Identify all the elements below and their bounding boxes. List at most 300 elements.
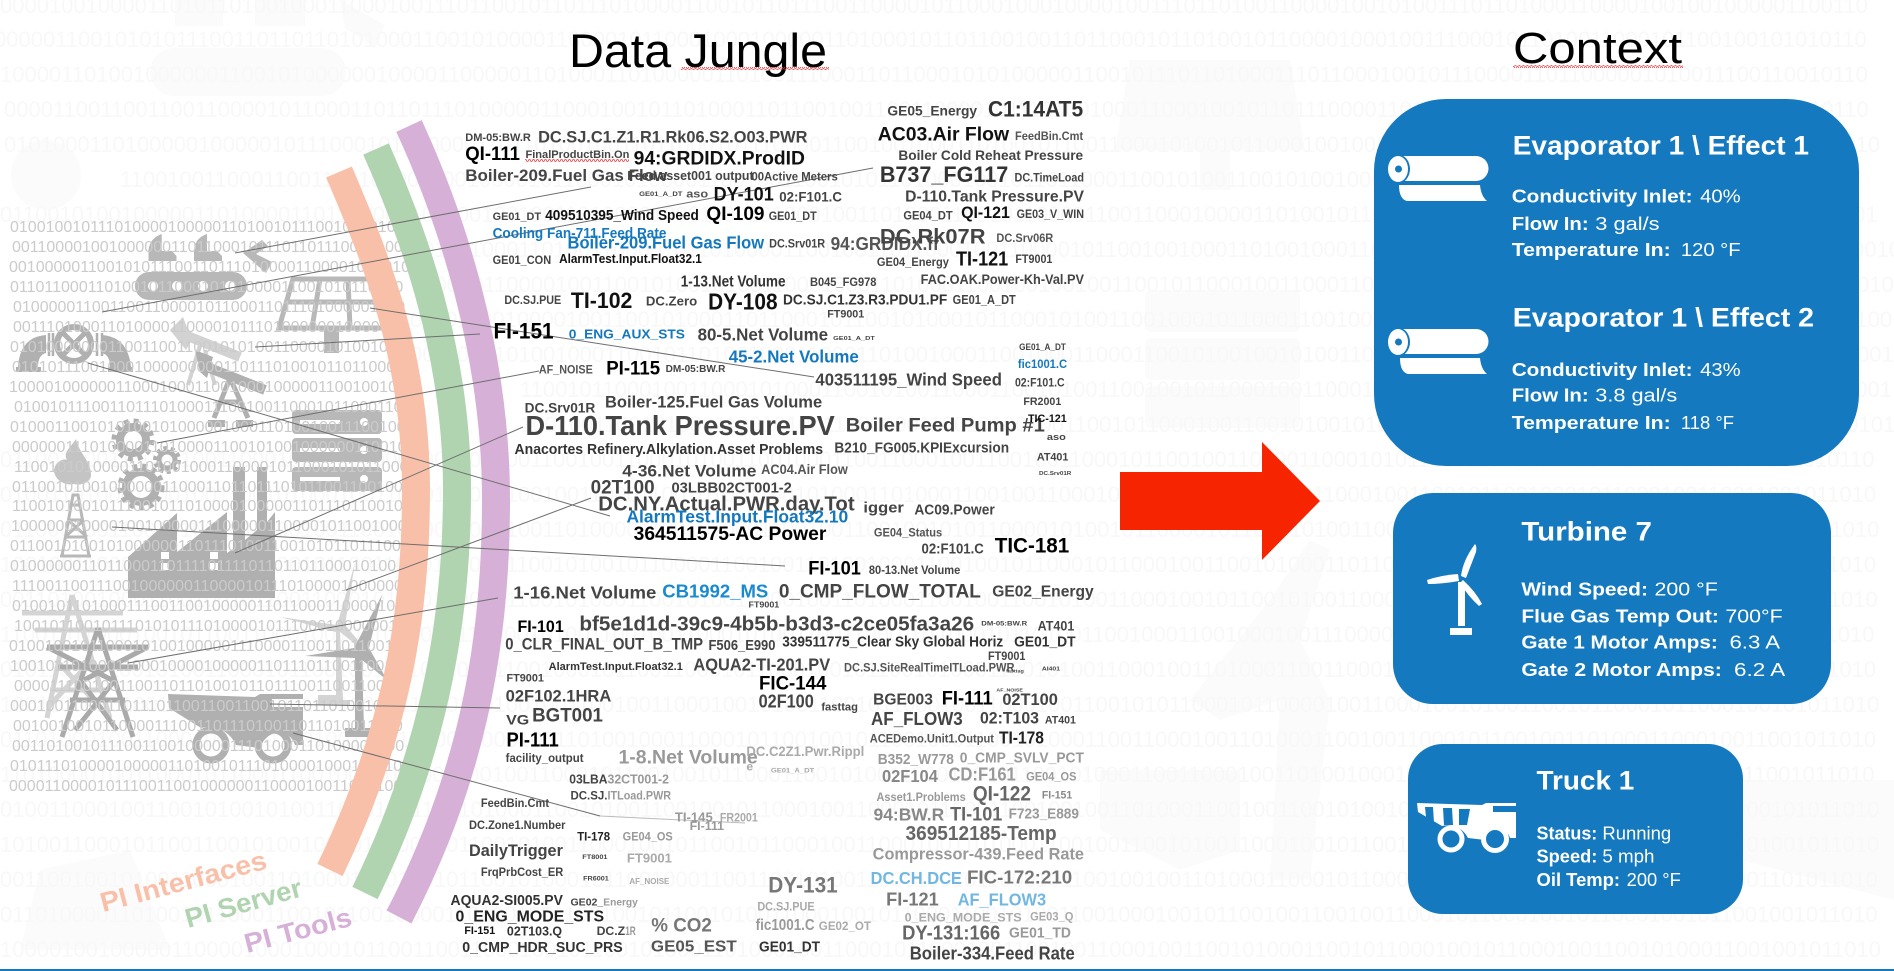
background binary pattern: 011000100110010100101100010011001010011000100110100001100101000110010011001001010110000101001011000010110001010011001011010011000100100101100010110001011010 bbox=[0, 517, 1879, 542]
foreground binary text bbox=[9, 219, 410, 795]
word cloud: upper tags: DC.Zero bbox=[646, 295, 697, 309]
icon: server bbox=[292, 410, 382, 491]
foreground binary text: 010101110010001000000000110111010010110110001 bbox=[12, 359, 404, 376]
word cloud: upper tags: GE04_Energy bbox=[877, 255, 949, 269]
word cloud: upper tags: GE01_CON bbox=[493, 253, 551, 267]
word cloud: lower tags: DC.SJ.PUE bbox=[757, 900, 815, 913]
word cloud: upper tags: GE01_DT bbox=[493, 209, 541, 223]
card text: truck readings bbox=[1537, 766, 1681, 891]
word cloud: lower tags: AF_FLOW3 bbox=[871, 708, 963, 729]
word cloud: lower tags: 32CT001-2 bbox=[608, 773, 669, 787]
word cloud: upper tags: DM-05:BW.R bbox=[666, 363, 726, 375]
card text: truck readings: Speed: bbox=[1537, 846, 1597, 867]
word cloud: upper tags: DY-101 bbox=[714, 183, 774, 205]
word cloud: lower tags: ITLoad.PWR bbox=[608, 789, 671, 802]
word cloud: middle tags: AC09.Power bbox=[914, 501, 995, 518]
word cloud: upper tags: 409510395_Wind Speed bbox=[545, 207, 699, 223]
word cloud: upper tags: DC.SJ.C1.Z3.R3.PDU1.PF bbox=[783, 291, 947, 308]
word cloud: upper tags: 02:F101.C bbox=[1015, 376, 1065, 389]
word cloud: middle tags: D-110.Tank Pressure.PV bbox=[525, 410, 835, 441]
card text: evaporator readings bbox=[1512, 131, 1814, 434]
word cloud: upper tags: 0_ENG_AUX_STS bbox=[569, 328, 685, 342]
word cloud: lower tags: FT9001 bbox=[507, 672, 544, 684]
card text: evaporator readings: 40% bbox=[1700, 186, 1741, 207]
word cloud: upper tags: FeedBin.Cmt bbox=[1015, 129, 1084, 143]
word cloud: middle tags: 03LBB02CT001-2 bbox=[671, 479, 792, 496]
word cloud: lower tags: FT8001 bbox=[582, 853, 608, 861]
card text: evaporator readings: 118 °F bbox=[1681, 413, 1734, 434]
wavy underline under FinalProductBin.On bbox=[525, 159, 629, 162]
word cloud: lower tags bbox=[451, 672, 1084, 964]
arc: PI Tools bbox=[399, 126, 496, 917]
word cloud: lower tags: GE02_ bbox=[570, 897, 604, 908]
word cloud: lower tags: AF_FLOW3 bbox=[958, 890, 1046, 910]
foreground binary text: 000011100100110011011010010110111001100110001 bbox=[14, 678, 403, 695]
foreground binary text: 0010000011001010111001101110100001100001001010 bbox=[9, 259, 410, 276]
word cloud: middle tags: B210_FG005.KPIExcursion bbox=[834, 439, 1009, 456]
background binary pattern: 110010110001001100010100011001010011000110010100110010010110001001100010110010100110100010011000100101100010110001 bbox=[520, 377, 1892, 402]
icon: wind turbines bbox=[280, 563, 387, 737]
word cloud: middle tags: Boiler Feed Pump #1 bbox=[846, 414, 1045, 436]
word cloud: upper tags: DC.Srv01R bbox=[769, 237, 825, 250]
word cloud: middle tags: 02:F101.C bbox=[922, 540, 984, 557]
word cloud: lower tags: Boiler-334.Feed Rate bbox=[910, 943, 1075, 964]
card text: evaporator readings: Flow In: bbox=[1512, 214, 1589, 235]
word cloud: lower tags: BGE003 bbox=[873, 691, 933, 708]
card text: turbine readings: 6.2 A bbox=[1734, 660, 1785, 681]
foreground binary text: 010111010000100000110100101110100001000110110 bbox=[10, 758, 402, 775]
word cloud: lower tags: FI-111 bbox=[690, 819, 724, 833]
word cloud: lower tags: DC.Z bbox=[597, 924, 625, 938]
word cloud: lower tags: DC.C2Z1.Pwr.Rippl bbox=[746, 745, 864, 760]
word cloud: lower tags: Asset1.Problems bbox=[876, 790, 966, 804]
card text: turbine readings: Turbine 7 bbox=[1521, 517, 1652, 547]
icon: roll 2 bbox=[1386, 328, 1488, 374]
background binary pattern: 000011001100110011000010110001101101110100000110001001011010001101100100110011000010111010010001100010010110111000011010110001001100001011010001100101010110 bbox=[4, 97, 1869, 122]
word cloud: lower tags: 02F104 bbox=[882, 767, 939, 786]
card text: evaporator readings: Temperature In: bbox=[1512, 413, 1671, 434]
foreground binary text: 010000001101100011011110111101101101100010100 bbox=[10, 558, 396, 575]
background binary pattern: 001101001000110010010110011000101100100010110010100011001010011000100110100011001001100101001100010010110010100110001100010010110100001100100110100001011010 bbox=[0, 587, 1878, 612]
word cloud: lower tags: ACEDemo.Unit1.Output bbox=[870, 732, 994, 745]
bottom rule bbox=[0, 969, 1894, 971]
card text: turbine readings: 200 °F bbox=[1655, 579, 1718, 600]
word cloud: lower tags: DC.SJ. bbox=[570, 789, 608, 802]
background binary pattern: 100001101001000000110010100000010000110000011010001101000001101001110001101100010101000001100101110110100011101100010010111000011011000001010011100110010110 bbox=[0, 62, 1868, 87]
word cloud: lower tags: PI-111 bbox=[507, 728, 559, 751]
word cloud: upper tags: GE03_V_WIN bbox=[1017, 207, 1084, 221]
background binary pattern: 010110001100101001100010110010011010010001100100010110011000101100010010110010100011001010011000100110100011001100010110010011010010110001010011000101011010 bbox=[0, 657, 1876, 682]
word cloud: middle tags: AT401 bbox=[1037, 451, 1068, 463]
word cloud: upper tags: QI-111 bbox=[465, 142, 520, 164]
word cloud: lower tags: 94:BW.R bbox=[874, 806, 945, 825]
card text: evaporator readings: Flow In: bbox=[1512, 385, 1589, 406]
word cloud: lower tags: TI-101 bbox=[950, 803, 1002, 825]
word cloud: middle tags: 1-16.Net Volume bbox=[513, 584, 656, 603]
word cloud: lower tags: AF_NOISE bbox=[629, 877, 669, 887]
arrow: red transition arrow bbox=[1120, 442, 1320, 560]
panel: evaporator context card bbox=[1374, 99, 1859, 466]
background binary pattern: 011010000110100101100011001011001000011010010011001001011001010011000100101100011001010011001000100101100100110010011000101100010010110001001011001001011010 bbox=[0, 902, 1878, 927]
foreground binary text: 010000011001100110000101100011011101000001000 bbox=[13, 299, 405, 316]
word cloud: upper tags: TI-121 bbox=[956, 247, 1008, 270]
word cloud: lower tags: BGT001 bbox=[532, 704, 603, 726]
word cloud: middle tags: 80-13.Net Volume bbox=[869, 563, 961, 577]
word cloud: middle tags: 02T100 bbox=[591, 476, 655, 498]
background binary pattern: 011001010010000011010000110110000010110010010011010000100011001010001001101000110010110000110011000100001101001011000110100101100011001001010101100100101101 bbox=[0, 202, 1878, 227]
word cloud: lower tags: 0_ENG_MODE_STS bbox=[905, 911, 1022, 924]
word cloud: lower tags: 02F102.1HRA bbox=[506, 687, 612, 706]
arc: PI Server bbox=[365, 149, 457, 893]
card text: evaporator readings: 3.8 gal/s bbox=[1595, 385, 1677, 406]
word cloud: upper tags: C1:14AT5 bbox=[988, 97, 1083, 122]
word cloud: upper tags: GE01_A_DT bbox=[1019, 342, 1066, 353]
word cloud: upper tags: DM-05:BW.R bbox=[465, 131, 531, 144]
foreground binary text: 100000010000100100000111000001100001011001000 bbox=[11, 518, 407, 535]
icon: valve bbox=[16, 327, 133, 372]
word cloud: upper tags: Feed.asset001 output bbox=[627, 169, 754, 184]
word cloud: upper tags: AC03.Air Flow bbox=[878, 123, 1010, 145]
word cloud: middle tags: aso bbox=[1047, 432, 1066, 443]
card text: turbine readings: Wind Speed: bbox=[1521, 579, 1648, 600]
word cloud: lower tags: DY-131 bbox=[768, 873, 838, 898]
word cloud: upper tags: AlarmTest.Input.Float32.1 bbox=[559, 252, 702, 266]
card text: turbine readings bbox=[1521, 517, 1785, 681]
word cloud: middle tags: TIC-181 bbox=[995, 534, 1069, 558]
word cloud: lower tags: 0_CMP_SVLV_PCT bbox=[960, 749, 1084, 766]
word cloud: upper tags: 94:GRDIDX.ProdID bbox=[634, 147, 805, 169]
rotated legend labels bbox=[97, 845, 355, 959]
word cloud: middle tags: 4-36.Net Volume bbox=[622, 463, 757, 481]
word cloud: upper tags: 94:GRDIDX.ff bbox=[831, 233, 940, 254]
word cloud: middle tags: CB1992_MS bbox=[662, 581, 768, 602]
word cloud: middle tags: DC.Srv01R bbox=[1039, 471, 1071, 477]
word cloud: lower tags: GE04_OS bbox=[1026, 770, 1076, 783]
word cloud: lower tags: e bbox=[746, 760, 753, 773]
foreground binary text: 010010110100011100110010000011011000110000100 bbox=[12, 598, 404, 615]
word cloud: middle tags: AlarmTest.Input.Float32.10 bbox=[626, 508, 848, 527]
word cloud: lower tags: AF_NOISE bbox=[996, 688, 1023, 693]
word cloud: middle tags: TIC-121 bbox=[1028, 412, 1067, 425]
word cloud: middle tags: AQUA2-TI-201.PV bbox=[693, 656, 831, 675]
icon: truck bbox=[168, 694, 303, 760]
foreground binary text: 000100110001101110110011001100101101101001001 bbox=[10, 698, 400, 715]
word cloud: upper tags: Boiler-209.Fuel Gas Flow bbox=[465, 167, 668, 185]
foreground binary text: 011001010010100000011011101001100101011011100 bbox=[10, 538, 401, 555]
word cloud: upper tags: QI-121 bbox=[961, 204, 1010, 222]
panel: turbine context card bbox=[1393, 493, 1831, 704]
word cloud: upper tags: TI-102 bbox=[571, 289, 632, 313]
word cloud: lower tags: % CO2 bbox=[651, 914, 712, 936]
card text: turbine readings: 700°F bbox=[1725, 606, 1783, 627]
word cloud: middle tags bbox=[505, 394, 1094, 675]
icon: pylons bbox=[22, 595, 148, 737]
arc: PI Interfaces bbox=[330, 172, 416, 870]
word cloud: middle tags: FT9001 bbox=[988, 649, 1026, 663]
word cloud: lower tags: TI-178 bbox=[577, 830, 610, 843]
word cloud: lower tags: TI-178 bbox=[999, 728, 1044, 748]
word cloud: lower tags: GE01_TD bbox=[1009, 924, 1071, 941]
foreground binary text: 010010010110001010010000011100001100110110010 bbox=[9, 638, 402, 655]
word cloud: upper tags: 00Active Meters bbox=[751, 170, 838, 183]
card text: evaporator readings: 3 gal/s bbox=[1595, 214, 1660, 235]
word cloud: upper tags: FAC.OAK.Power-Kh-Val.PV bbox=[921, 273, 1084, 287]
word cloud: middle tags: FI-101 bbox=[517, 618, 564, 636]
word cloud: middle tags: AT401 bbox=[1038, 619, 1074, 634]
icon: solar panel bbox=[279, 279, 385, 353]
foreground binary text: 100101100101110101011101000010111000100000010 bbox=[14, 618, 406, 635]
word cloud: upper tags: fic1001.C bbox=[1018, 357, 1067, 371]
word cloud: middle tags: GE04_Status bbox=[874, 526, 942, 539]
word cloud: lower tags: fasttag bbox=[821, 701, 858, 713]
word cloud: lower tags: FI-121 bbox=[886, 889, 939, 910]
foreground binary text: 100001000000110001000110010001000001100100100 bbox=[9, 379, 406, 396]
word cloud: lower tags: 0_ENG_MODE_STS bbox=[456, 908, 604, 925]
word cloud: upper tags: DC.SJ.C1.Z1.R1.Rk06.S2.O03.PWR bbox=[538, 128, 808, 147]
word cloud: lower tags: B352_W778 bbox=[878, 751, 954, 768]
word cloud: middle tags: FT9001 bbox=[749, 601, 780, 610]
word cloud: lower tags: 0_CMP_HDR_SUC_PRS bbox=[462, 939, 623, 955]
word cloud: lower tags: Compressor-439.Feed Rate bbox=[873, 845, 1084, 864]
card text: evaporator readings: 120 °F bbox=[1681, 240, 1741, 261]
foreground binary text: 010100000001100110011001010100110000101001000 bbox=[10, 339, 406, 356]
word cloud: upper tags: 403511195_Wind Speed bbox=[815, 371, 1002, 390]
word cloud: upper tags: FT9001 bbox=[1015, 252, 1053, 266]
foreground binary text: 010001100101010010100000100011010010011100100 bbox=[10, 419, 406, 436]
connector lines bbox=[88, 168, 873, 823]
word cloud: lower tags: FI-151 bbox=[1042, 789, 1072, 801]
word cloud: lower tags: GE05_EST bbox=[651, 938, 737, 955]
foreground binary text: 111001100111001000000110000101110100001000000 bbox=[12, 578, 403, 595]
word cloud: upper tags: Boiler-209.Fuel Gas Flow bbox=[568, 234, 764, 253]
card text: turbine readings: Gate 2 Motor Amps: bbox=[1521, 660, 1722, 681]
label: PI Tools: PI Tools bbox=[241, 902, 355, 959]
background binary pattern: 110100001001100010110001100100010110011001001100010110010010110001100101001100010010110010100011001100010011010010001100010110001100101001100010011001011010 bbox=[0, 762, 1874, 787]
word cloud: lower tags: facility_output bbox=[506, 751, 584, 765]
word cloud: upper tags: DC.Srv06R bbox=[996, 231, 1053, 245]
word cloud: middle tags: AlarmTest.Input.Float32.1 bbox=[549, 660, 683, 673]
card text: evaporator readings: 43% bbox=[1700, 360, 1741, 381]
word cloud: lower tags: GE01_A_DT bbox=[771, 766, 815, 774]
foreground binary text: 110010101000011010010001100001011000101011000 bbox=[14, 459, 409, 476]
word cloud: upper tags: GE01_A_DT bbox=[639, 190, 683, 198]
word cloud: upper tags bbox=[465, 97, 1085, 390]
word cloud: lower tags: GE03_Q bbox=[1030, 910, 1074, 923]
word cloud: lower tags: GE01_DT bbox=[759, 938, 821, 955]
word cloud: lower tags: 02T100 bbox=[1002, 691, 1058, 709]
word cloud: lower tags: DC.Zone1.Number bbox=[469, 818, 566, 832]
word cloud: lower tags: GE04_OS bbox=[623, 830, 673, 843]
word cloud: upper tags: DC.Rk07R bbox=[880, 225, 986, 249]
word cloud: middle tags: AI401 bbox=[1042, 667, 1060, 672]
card text: truck readings: Running bbox=[1602, 823, 1671, 844]
background binary pattern: 010100011010000010000010111000101010000110110100100110110001011100001100100100011010010110011000101001011000100100100110100011011010001011010010110010010110 bbox=[4, 132, 1880, 157]
background binary pattern: 101001100010110011001010010010110001001100101001100010010110010110001001100010011010001100100110010100110001001011001001000110010011001010010110001001011010 bbox=[0, 832, 1879, 857]
word cloud: middle tags: DM-05:BW.R bbox=[981, 619, 1028, 627]
word cloud: middle tags: Boiler-125.Fuel Gas Volume bbox=[605, 394, 822, 412]
icon: derrick bbox=[60, 495, 91, 556]
word cloud: lower tags: VG bbox=[506, 713, 529, 728]
background binary pattern: 100100110000101101000110010110011000101000110010100101100001100100110100100011001001011000101100010011001010001101100100010110001101000100101100110001011010 bbox=[0, 552, 1876, 577]
card text: truck readings: Status: bbox=[1537, 823, 1597, 844]
icon: flame bbox=[54, 439, 91, 485]
card text: evaporator readings: Temperature In: bbox=[1512, 240, 1671, 261]
word cloud: upper tags: DY-108 bbox=[708, 288, 778, 315]
word cloud: lower tags: 02T103.Q bbox=[507, 925, 562, 939]
word cloud: lower tags: FrqPrbCost_ER bbox=[481, 865, 563, 879]
card text: truck readings: 5 mph bbox=[1602, 846, 1655, 867]
foreground binary text: 001100001001000000110110001011101101110010100 bbox=[12, 239, 403, 256]
word cloud: lower tags: DY-131:166 bbox=[902, 921, 1000, 944]
icon: factory bbox=[128, 467, 275, 598]
background binary pattern: 010011000100110010100101001100010011001010001100101001100100101100010011000101100011001001001101000110010011001010010110001001100010010110010011000101011010 bbox=[0, 797, 1879, 822]
icon: gears bbox=[114, 421, 179, 508]
foreground binary text: 000011000010111001100100000011000010011000100 bbox=[9, 778, 402, 795]
word cloud: lower tags: FI-111 bbox=[942, 687, 993, 709]
foreground binary text: 100101101000110001000010000011011101100110011 bbox=[10, 658, 401, 675]
word cloud: upper tags: 02:F101.C bbox=[779, 190, 842, 205]
word cloud: lower tags: CD:F161 bbox=[948, 764, 1016, 785]
card text: truck readings: Oil Temp: bbox=[1537, 870, 1620, 891]
foreground binary text: 001110100011010000110000101110100000010000010 bbox=[13, 319, 406, 336]
icon: truck bbox=[1417, 803, 1516, 850]
word cloud: lower tags: FI-151 bbox=[464, 924, 495, 937]
word cloud: lower tags: F723_E889 bbox=[1009, 805, 1079, 822]
icon: pumpjack bbox=[170, 317, 265, 427]
word cloud: lower tags: Energy bbox=[603, 897, 638, 908]
word cloud: upper tags: D-110.Tank Pressure.PV bbox=[905, 188, 1085, 205]
word cloud: middle tags: 0_CLR_FINAL_OUT_B_TMP bbox=[505, 636, 703, 654]
word cloud: upper tags: GE05_Energy bbox=[887, 104, 977, 119]
foreground binary text: 001101001011100110010000011101000110100000100 bbox=[12, 738, 404, 755]
title: Data Jungle: Data Jungle bbox=[569, 24, 827, 77]
word cloud: lower tags: 369512185-Temp bbox=[906, 822, 1057, 844]
card text: turbine readings: Flue Gas Temp Out: bbox=[1521, 606, 1719, 627]
card text: truck readings: 200 °F bbox=[1627, 870, 1681, 891]
icon: conveyor bbox=[135, 234, 272, 300]
label: PI Server: PI Server bbox=[182, 873, 306, 934]
background binary pattern: 001100100101001100010011010001100100101100101000101100100011001100101001100010010110001011001001001101000110001011000100110010010100110001011001001101011010 bbox=[0, 867, 1878, 892]
word cloud: middle tags: bf5e1d1d-39c9-4b5b-b3d3-c2ce05fa3a26 bbox=[579, 612, 974, 635]
word cloud: middle tags: 364511575-AC Power bbox=[634, 522, 827, 544]
foreground binary text: 011011000110100101100010101000011001010110000 bbox=[10, 279, 403, 296]
background binary pattern: 100100110010100011001010011000100110010100100110010110001001100101001010011000100110001001011000100101100101100101 bbox=[520, 412, 1894, 437]
background binary pattern: 000001100101010111001101101101010001100101000011000010110001000100000110100010110110010011011000101101001011000010001001110001011010011000101100100101010110 bbox=[0, 27, 1867, 52]
word cloud: middle tags: GE01_DT bbox=[1014, 633, 1076, 650]
word cloud: lower tags: 02F100 bbox=[759, 691, 814, 712]
card text: turbine readings: 6.3 A bbox=[1729, 632, 1780, 653]
word cloud: middle tags: 0_CMP_FLOW_TOTAL bbox=[779, 580, 981, 602]
panel: concentric PI arcs bbox=[330, 126, 496, 917]
title: Context: Context bbox=[1513, 24, 1682, 73]
word cloud: lower tags: FR2001 bbox=[720, 811, 758, 824]
word cloud: middle tags: AC04.Air Flow bbox=[761, 463, 848, 478]
word cloud: upper tags: aso bbox=[686, 188, 708, 200]
foreground binary text: 011001010010000001100011011011101011001100100 bbox=[12, 479, 403, 496]
word cloud: lower tags: DailyTrigger bbox=[469, 842, 563, 860]
word cloud: lower tags: AQUA2-SI005.PV bbox=[451, 892, 563, 908]
background binary pattern: 100001001000001100001000100010110011001100010010110010100011010001001100010110001001100100110001001100101000110010110001001011000100110010100011001001011010 bbox=[0, 937, 1881, 962]
background binary pattern: 100110001010011000100110010010010110001101001001100100110001001010011001011000100110001001100101011000101100001001100010010100110010110001011000100101011010 bbox=[0, 692, 1879, 717]
word cloud: lower tags: FT9001 bbox=[627, 852, 672, 866]
word cloud: lower tags: 02:T103 bbox=[980, 709, 1039, 728]
icon: wind turbine bbox=[1427, 544, 1482, 635]
word cloud: middle tags: Anacortes Refinery.Alkylation.Asset Problems bbox=[514, 441, 823, 458]
word cloud: upper tags: GE01_DT bbox=[769, 209, 817, 223]
word cloud: lower tags: GE02_OT bbox=[819, 919, 872, 933]
word cloud: lower tags: DC.CH.DCE bbox=[871, 869, 962, 888]
word cloud: lower tags: FIC-172:210 bbox=[967, 867, 1072, 888]
background binary pattern: 010011010001100100110010100010011000110010100100110001100101001100101000110100011001001100010110011001001010011000100110010110010001011000100110011001011010 bbox=[0, 482, 1876, 507]
word cloud: middle tags: fasttag bbox=[1006, 669, 1024, 674]
word cloud: upper tags: AF_NOISE bbox=[539, 363, 593, 376]
foreground binary text: 110010100101110010110100001000001101110110010 bbox=[12, 498, 403, 515]
word cloud: lower tags: FeedBin.Cmt bbox=[481, 796, 549, 810]
word cloud: upper tags: GE01_A_DT bbox=[833, 336, 875, 342]
word cloud: upper tags: GE01_A_DT bbox=[953, 293, 1016, 307]
word cloud: lower tags: FIC-144 bbox=[759, 672, 827, 694]
word cloud: middle tags: F506_E990 bbox=[709, 637, 775, 653]
word cloud: lower tags: fic1001.C bbox=[756, 916, 815, 933]
word cloud: upper tags: FT9001 bbox=[827, 308, 864, 320]
left data source icons bbox=[16, 234, 387, 760]
word cloud: middle tags: DC.SJ.SiteRealTimeITLoad.PWR bbox=[844, 661, 1015, 674]
word cloud: upper tags: 1-13.Net Volume bbox=[681, 273, 786, 290]
word cloud: upper tags: FinalProductBin.On bbox=[525, 148, 629, 161]
word cloud: middle tags: GE02_Energy bbox=[992, 583, 1094, 600]
background binary pattern: 1100100110001100110010000110010000101100010100001100100110010101101000100101101100011001010011001010010000110011000110010001101010011100010001011 bbox=[120, 167, 1861, 192]
foreground binary text: 001001001011000011100110111010011011010011000 bbox=[13, 718, 403, 735]
word cloud: upper tags: QI-109 bbox=[706, 202, 765, 224]
card text: evaporator readings: Conductivity Inlet: bbox=[1512, 186, 1692, 207]
word cloud: middle tags: FI-101 bbox=[808, 557, 861, 579]
background binary pattern: 110010110001001011001100010010110010001101001010011001001100010100110011000101100010110100110010001100100010011100001000101101000100001101100110010001011010 bbox=[0, 622, 1874, 647]
card text: turbine readings: Gate 1 Motor Amps: bbox=[1521, 632, 1718, 653]
word cloud: lower tags: 03LBA bbox=[569, 773, 608, 787]
foreground binary text: 010010111001101110100011100100110001011000110 bbox=[14, 399, 403, 416]
word cloud: lower tags: FR6001 bbox=[583, 874, 609, 882]
word cloud: lower tags: 1-8.Net Volume bbox=[618, 746, 758, 768]
panel: truck context card bbox=[1408, 744, 1743, 914]
word cloud: upper tags: Boiler Cold Reheat Pressure bbox=[898, 149, 1083, 164]
word cloud: middle tags: FR2001 bbox=[1023, 395, 1061, 408]
word cloud: upper tags: 80-5.Net Volume bbox=[698, 326, 828, 345]
word cloud: lower tags: 1R bbox=[625, 924, 636, 938]
word cloud: lower tags: QI-122 bbox=[973, 782, 1031, 806]
word cloud: upper tags: Cooling Fan-711.Feed Rate bbox=[493, 225, 666, 241]
word cloud: upper tags: DC.SJ.PUE bbox=[504, 293, 561, 307]
label: PI Interfaces: PI Interfaces bbox=[97, 845, 270, 918]
word cloud: upper tags: PI-115 bbox=[606, 357, 660, 379]
background binary pattern: 011001000110010100110001001101000010011010001100100110001010011001000110011000100110010011000101100100110100110001010110001100100101100110001011000101010110 bbox=[0, 447, 1874, 472]
word cloud: upper tags: 45-2.Net Volume bbox=[729, 348, 859, 367]
background binary pattern: 011010001001100010011001001001100101001100010011010010001100010110010010110010001100101000110011000100110100011001001100010110010011010001100010011001011010 bbox=[0, 727, 1876, 752]
word cloud: middle tags: igger bbox=[863, 499, 904, 516]
word cloud: upper tags: FI-151 bbox=[493, 319, 554, 344]
word cloud: middle tags: 339511775_Clear Sky Global Horiz bbox=[782, 633, 1003, 650]
card text: truck readings: Truck 1 bbox=[1537, 766, 1634, 796]
word cloud: upper tags: B045_FG978 bbox=[810, 275, 877, 289]
word cloud: middle tags: DC.NY.Actual.PWR.day.Tot bbox=[598, 492, 855, 515]
card text: evaporator readings: Conductivity Inlet: bbox=[1512, 360, 1692, 381]
word cloud: middle tags: DC.Srv01R bbox=[525, 401, 596, 416]
icon: roll 1 bbox=[1386, 154, 1488, 201]
word cloud: upper tags: GE04_DT bbox=[903, 209, 953, 222]
word cloud: lower tags: AT401 bbox=[1045, 714, 1076, 726]
foreground binary text: 000000111010000110100001100101001000000110010 bbox=[12, 439, 407, 456]
word cloud: upper tags: B737_FG117 bbox=[880, 163, 1008, 187]
foreground binary text: 010010010111010000100000110100101110010000100 bbox=[10, 219, 405, 236]
